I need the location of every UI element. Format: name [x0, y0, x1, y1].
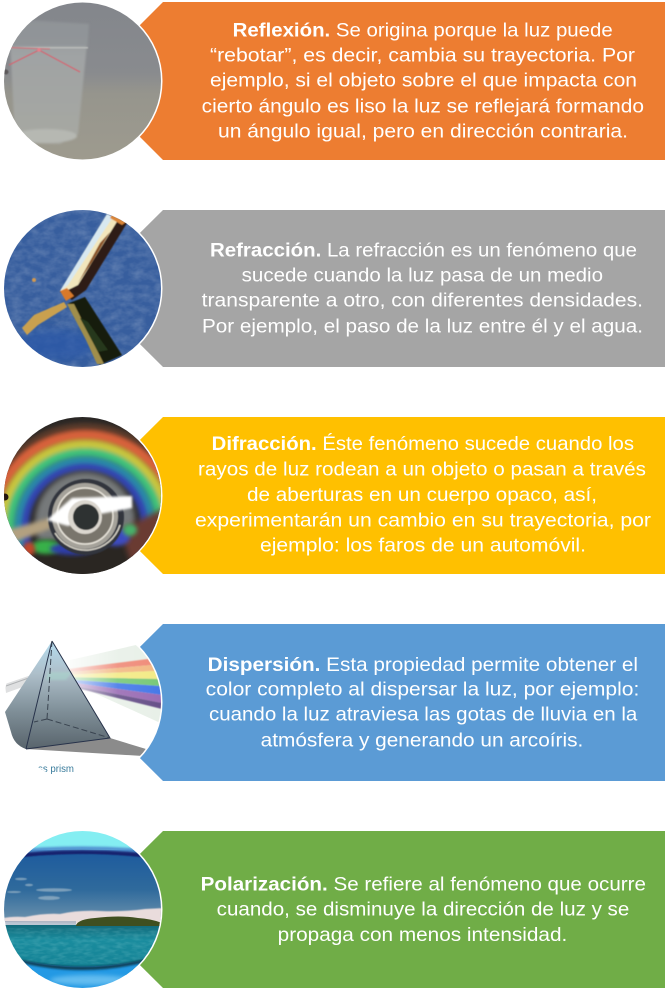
- text: difracción: ejemplo: los faros de un automóvil.: [260, 535, 586, 557]
- text: refracción: sucede cuando la luz pasa de un medio: [242, 265, 603, 287]
- text: reflexión: cierto ángulo es liso la luz se reflejará formando: [202, 95, 644, 117]
- panel: dispersión: [0, 620, 665, 785]
- text: difracción: [195, 432, 651, 557]
- panel: reflexión: [0, 0, 665, 162]
- text: reflexión: ejemplo, si el objeto sobre el que impacta con: [210, 70, 637, 92]
- text: refracción: Por ejemplo, el paso de la luz entre él y el agua.: [202, 315, 643, 337]
- text: dispersión: color completo al dispersar la luz, por ejemplo:: [206, 679, 639, 701]
- text: reflexión: “rebotar”, es decir, cambia su trayectoria. Por: [210, 45, 635, 67]
- arrow banner: refracción: [84, 210, 665, 367]
- text: polarización: cuando, se disminuye la dirección de luz y se: [217, 899, 629, 921]
- text: dispersión: [206, 654, 639, 752]
- text: refracción: transparente a otro, con diferentes densidades.: [202, 290, 643, 312]
- arrow banner: polarización: [84, 831, 665, 988]
- panel: difracción: [4, 417, 665, 574]
- text: difracción: Difracción. Éste fenómeno sucede cuando los: [212, 432, 634, 455]
- text: dispersión: atmósfera y generando un arcoíris.: [261, 730, 583, 752]
- photo: island seen through a polarized lens: [0, 828, 165, 990]
- text: reflexión: [202, 20, 644, 142]
- text: reflexión: un ángulo igual, pero en dirección contraria.: [218, 120, 628, 142]
- text: difracción: experimentarán un cambio en su trayectoria, por: [195, 510, 651, 532]
- text: polarización: [201, 874, 646, 946]
- photo: laser reflected in a glass of water: [0, 0, 165, 162]
- text: polarización: propaga con menos intensidad.: [278, 924, 567, 946]
- arrow banner: dispersión: [84, 624, 665, 781]
- photo: stick refracted in water: [0, 205, 165, 370]
- text: dispersión: Dispersión. Esta propiedad permite obtener el: [208, 654, 638, 676]
- photo: diffraction rainbow on a disc: [4, 417, 162, 574]
- panel: polarización: [0, 828, 665, 990]
- text: dispersión: cuando la luz atraviesa las gotas de lluvia en la: [209, 704, 637, 726]
- caption: prism: ss prism: [38, 763, 74, 775]
- text: refracción: Refracción. La refracción es un fenómeno que: [210, 240, 637, 262]
- arrow banner: reflexión: [84, 2, 665, 160]
- photo: glass prism dispersing light: [5, 640, 162, 774]
- panel: refracción: [0, 205, 665, 370]
- text: polarización: Polarización. Se refiere al fenómeno que ocurre: [201, 874, 646, 896]
- text: reflexión: Reflexión. Se origina porque la luz puede: [233, 20, 613, 42]
- text: difracción: de aberturas en un cuerpo opaco, así,: [247, 484, 597, 506]
- text: difracción: rayos de luz rodean a un objeto o pasan a través: [198, 459, 646, 481]
- arrow banner: difracción: [84, 417, 665, 574]
- text: refracción: [202, 240, 643, 337]
